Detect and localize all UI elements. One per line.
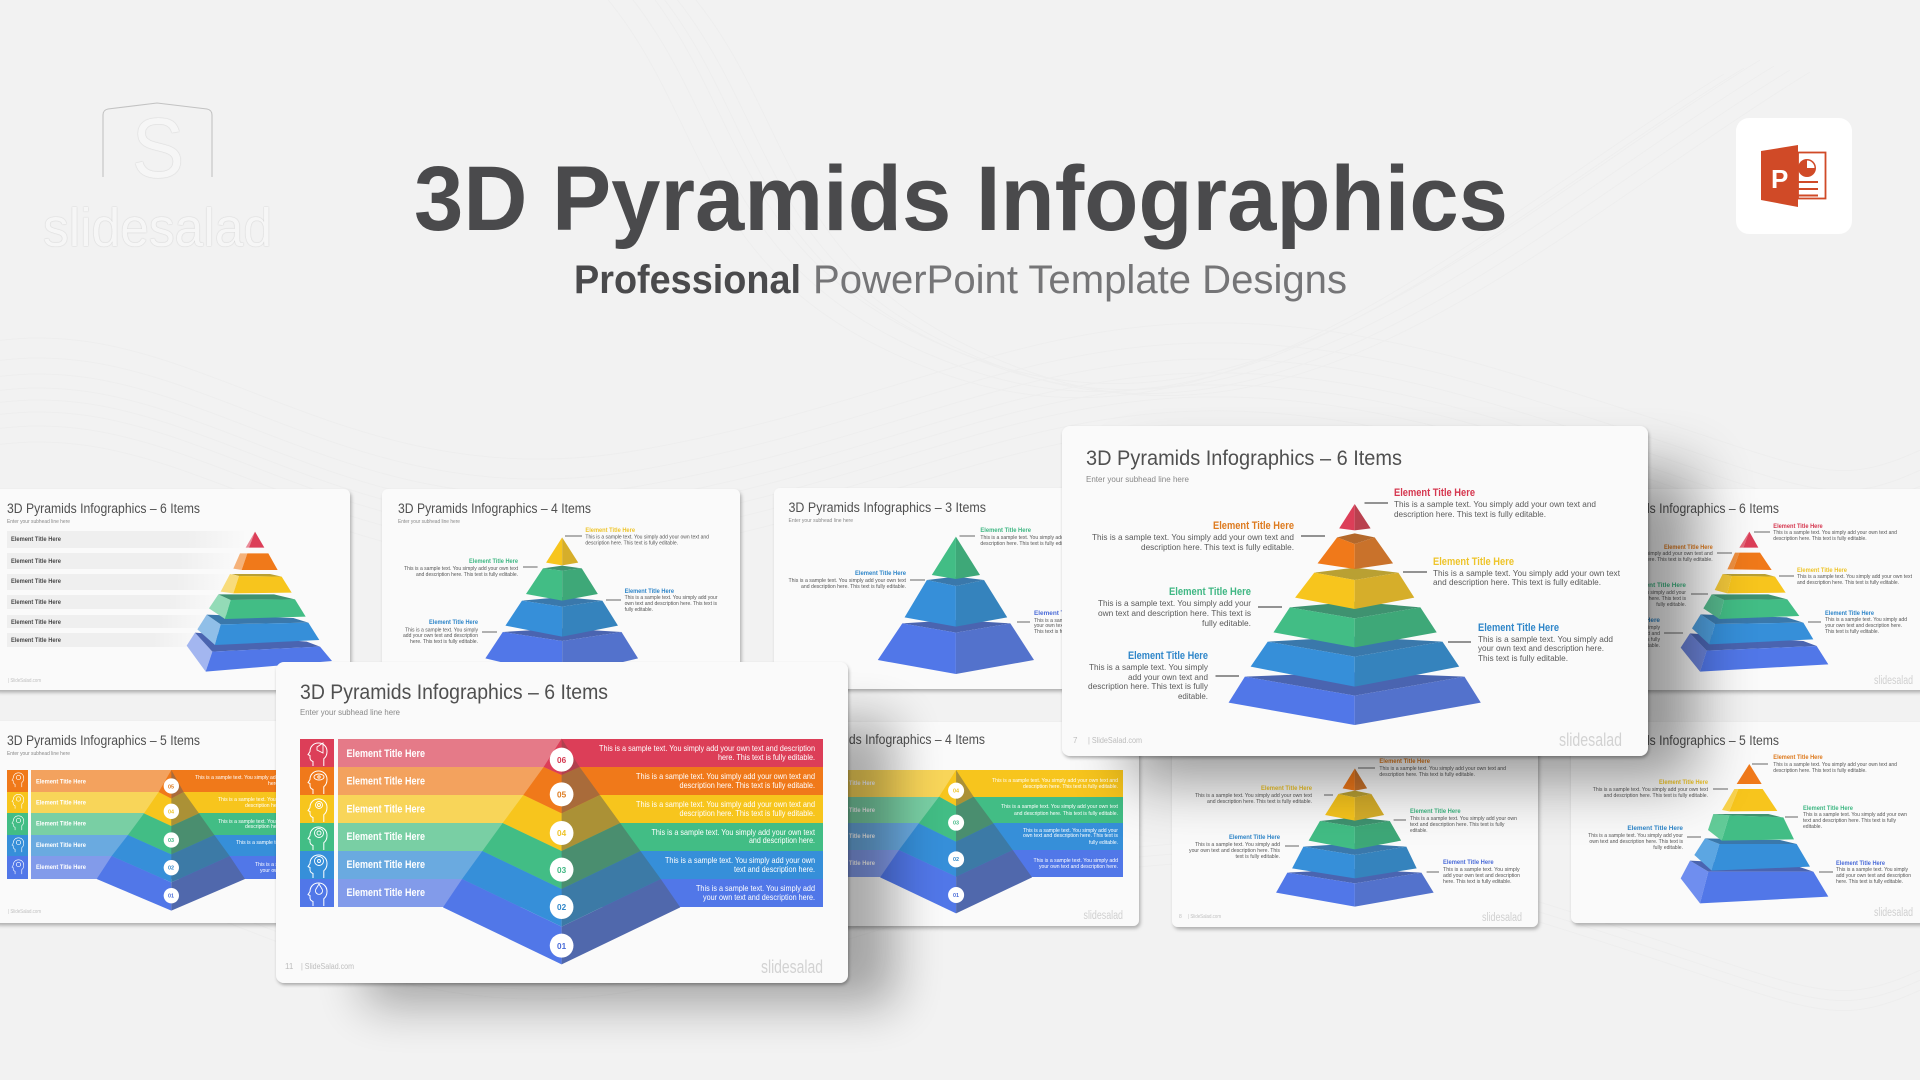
panel: slide 5 items perspective: fully editable. xyxy=(1653,845,1683,851)
callout: green: This is a sample text. You simply add your xyxy=(1098,598,1251,608)
panel: slide 5 items perspective xyxy=(1571,722,1920,923)
panel: slide list 6 items: Element Title Here xyxy=(11,599,61,606)
panel: slide 4 items: description here. This text is fully editable. xyxy=(585,541,678,547)
step numbers: 04 xyxy=(557,829,567,838)
step numbers: 01 xyxy=(557,942,567,951)
callout: orange: Element Title Here xyxy=(1213,520,1294,532)
panel: slide 5 items callouts: Element Title Here xyxy=(1229,834,1280,841)
panel: featured slide funnel 6 items xyxy=(276,662,848,983)
watermark: slidesalad xyxy=(1559,730,1622,750)
step numbers: 02 xyxy=(557,903,567,912)
panel: slide 4 items funnel: your own text and description here. xyxy=(1039,864,1118,870)
panel: slide list 6 items: 3D Pyramids Infographics – 6 Items xyxy=(7,501,200,516)
footer: | SlideSalad.com xyxy=(301,962,354,971)
panel: slide 5 items funnel: 3D Pyramids Infographics – 5 Items xyxy=(7,733,200,748)
subtitle: PowerPoint Template Designs xyxy=(813,258,1347,302)
panel: slide 4 items funnel: 3D Pyramids Infographics – 4 Items xyxy=(792,732,985,747)
row descriptions: text and description here. xyxy=(734,864,815,874)
row descriptions: description here. This text is fully editable. xyxy=(680,808,815,818)
panel: slide 4 items: here. This text is fully editable. xyxy=(410,639,478,645)
callout: orange: description here. This text is fully editable. xyxy=(1141,542,1294,552)
row titles: Element Title Here xyxy=(346,859,425,871)
panel: slide 3 items: Enter your subhead line here xyxy=(788,518,853,524)
panel: slide 5 items funnel xyxy=(0,721,350,923)
panel: slide 6 items perspective xyxy=(1568,489,1920,690)
panel: slide 5 items callouts: add your own text and description xyxy=(1443,873,1520,879)
row titles: Element Title Here xyxy=(346,831,425,843)
panel: slide 6 items perspective: description here. This text is fully editable. xyxy=(1618,557,1713,563)
callout: indigo xyxy=(1088,650,1239,701)
panel: slide 6 items perspective: 3D Pyramids Infographics – 6 Items xyxy=(1586,501,1779,516)
panel: slide 5 items perspective: Element Title Here xyxy=(1773,754,1823,761)
panel: slide 4 items funnel: and description here. This text is fully editable. xyxy=(1014,811,1118,817)
panel: slide 6 items perspective: Element Title Here xyxy=(1664,544,1713,551)
callout: blue xyxy=(1448,622,1613,663)
panel: featured slide pyramid 6 items xyxy=(1062,426,1648,756)
panel: slide 5 items perspective: Element Title Here xyxy=(1803,805,1853,812)
row descriptions: This is a sample text. You simply add xyxy=(696,883,815,893)
callout: blue: This text is fully editable. xyxy=(1478,653,1568,663)
panel: slide 4 items: This is a sample text. You simply add your xyxy=(625,595,718,601)
callout: indigo: This is a sample text. You simply xyxy=(1089,662,1209,672)
panel: slide 4 items: own text and description here. This text is xyxy=(625,601,717,607)
panel: slide 4 items funnel: slidesalad xyxy=(1084,910,1123,922)
panel: slide 5 items funnel: Element Title Here xyxy=(36,842,86,849)
panel: slide 4 items funnel: own text and description here. This text is xyxy=(1023,833,1118,839)
row titles: Element Title Here xyxy=(346,748,425,760)
panel: slide 5 items funnel: Element Title Here xyxy=(36,778,86,786)
row descriptions: This is a sample text. You simply add your own xyxy=(665,855,815,865)
logo wordmark: slidesalad xyxy=(43,198,272,258)
heading: 3D Pyramids Infographics – 6 Items xyxy=(1086,447,1402,470)
panel: slide list 6 items: Element Title Here xyxy=(11,619,61,626)
panel: slide 5 items callouts: text is fully editable. xyxy=(1236,854,1280,860)
panel: slide 3 items: This is a sample text. You simply add your own text xyxy=(788,578,907,584)
panel: slide list 6 items xyxy=(0,489,350,690)
callout: orange: This is a sample text. You simply add your own text and xyxy=(1092,532,1294,542)
chart: 3D pyramid xyxy=(1229,504,1481,725)
callout: green xyxy=(1098,586,1282,628)
row titles: Element Title Here xyxy=(346,804,425,816)
panel: slide 3 items: This is a sample text. xyxy=(1034,618,1082,624)
row descriptions xyxy=(599,743,816,902)
icon: PowerPoint: P xyxy=(1771,164,1788,194)
panel: slide 6 items perspective: Element Title Here xyxy=(1825,610,1874,617)
panel: slide 3 items: This is a sample text. You simply add your own text and xyxy=(980,535,1106,541)
panel: slide 6 items perspective: Element Title Here xyxy=(1604,617,1660,624)
callout: yellow: This is a sample text. You simply add your own text xyxy=(1433,568,1621,578)
panel: slide 5 items perspective: 3D Pyramids Infographics – 5 Items xyxy=(1586,733,1779,748)
panel: slide 3 items: description here. This text is fully editable. xyxy=(980,541,1075,547)
panel: slide 6 items perspective: Element Title Here xyxy=(1630,582,1686,589)
watermark: slidesalad xyxy=(761,957,823,977)
panel: slide 5 items funnel: Enter your subhead line here xyxy=(7,751,70,757)
callout: red xyxy=(1364,487,1596,519)
heading: 3D Pyramids Infographics – 6 Items xyxy=(300,681,608,704)
panel: slide 5 items perspective: This is a sample text. You simply add your own text and xyxy=(1773,762,1897,768)
panel: slide 4 items funnel: description here. This text is fully editable. xyxy=(1023,784,1118,790)
row titles xyxy=(346,748,425,899)
panel: slide 5 items perspective: This is a sample text. You simply add your own xyxy=(1803,812,1907,818)
callout: yellow: Element Title Here xyxy=(1433,556,1514,568)
panel: slide 4 items: and description here. This text is fully editable. xyxy=(416,572,518,578)
panel: slide 6 items perspective: This is a sample text. You simply add your own text and xyxy=(1588,551,1713,557)
panel: slide 4 items funnel: This is a sample text. You simply add your own text xyxy=(1001,804,1119,810)
subtitle xyxy=(574,258,1347,302)
row descriptions: your own text and description here. xyxy=(703,892,815,902)
panel: slide 5 items callouts: Element Title Here xyxy=(1410,808,1461,815)
footer: 11 xyxy=(285,962,294,971)
row descriptions: and description here. xyxy=(749,835,815,845)
callout: orange xyxy=(1092,520,1325,552)
callout: blue: This is a sample text. You simply add xyxy=(1478,634,1613,644)
callout: green: fully editable. xyxy=(1202,618,1251,628)
row titles: Element Title Here xyxy=(346,887,425,899)
row descriptions: description here. This text is fully editable. xyxy=(680,780,815,790)
panel: slide 4 items funnel: 04 xyxy=(953,788,959,794)
panel: slide 4 items funnel: Element Title Here xyxy=(825,860,875,867)
panel: slide 6 items perspective: This is a sample text. You simply add xyxy=(1825,617,1907,623)
logo: slidesalad xyxy=(43,101,272,258)
panel: slide 4 items xyxy=(382,489,740,690)
panel: slide 4 items: fully editable. xyxy=(625,607,653,613)
panel: slide 5 items callouts: This is a sample text. You simply add your own text xyxy=(1195,793,1313,799)
colour bars xyxy=(338,739,823,907)
row descriptions: This is a sample text. You simply add your own text and xyxy=(636,799,815,809)
step numbers: 05 xyxy=(557,790,567,800)
panel: slide 5 items perspective: Element Title Here xyxy=(1627,825,1683,832)
panel: slide 4 items: Element Title Here xyxy=(585,527,635,534)
panel: slide 5 items perspective: This is a sample text. You simply xyxy=(1836,867,1908,873)
subhead: Enter your subhead line here xyxy=(1086,474,1189,484)
panel: slide 5 items funnel: This is a sample text. You simply add xyxy=(255,862,339,868)
panel: slide 4 items funnel: 02 xyxy=(953,857,959,863)
panel: slide 5 items callouts: 8 xyxy=(1179,914,1182,920)
panel: slide 4 items funnel: Element Title Here xyxy=(825,780,875,787)
panel: slide 5 items funnel: 01 xyxy=(168,894,174,900)
chart: inverted tip pyramid xyxy=(443,739,680,964)
panel: slide 5 items perspective: add your own text and description xyxy=(1836,873,1911,879)
panel: slide 5 items callouts: This is a sample text. You simply add xyxy=(1195,842,1280,848)
panel: slide 5 items perspective: text and description here. This text is fully xyxy=(1803,818,1896,824)
panel: slide 6 items perspective: fully editable. xyxy=(1656,602,1686,608)
footer: 7 xyxy=(1073,736,1078,745)
panel: slide 6 items perspective: and description here. This text is fully editable. xyxy=(1797,580,1899,586)
step numbers: 03 xyxy=(557,866,567,875)
logo letter: S xyxy=(132,101,184,195)
panel: slide 4 items: 3D Pyramids Infographics – 4 Items xyxy=(398,501,591,516)
panel: slide 5 items perspective: editable. xyxy=(1803,824,1822,830)
panel: slide 4 items funnel: 01 xyxy=(953,893,959,899)
panel: slide list 6 items: | SlideSalad.com xyxy=(8,678,41,684)
panel: slide 5 items funnel: description here. This text is fully editable. xyxy=(245,824,339,830)
callout: yellow: and description here. This text is fully editable. xyxy=(1433,577,1601,587)
row descriptions: here. This text is fully editable. xyxy=(718,752,815,762)
panel: slide 5 items callouts: Element Title Here xyxy=(1261,785,1312,792)
panel: slide 5 items funnel: | SlideSalad.com xyxy=(8,909,41,915)
panel: slide 3 items: This text is fully xyxy=(1034,629,1069,635)
panel: slide 5 items perspective: Element Title Here xyxy=(1836,860,1885,867)
panel: slide 4 items: Enter your subhead line here xyxy=(398,519,460,525)
panel: slide 4 items funnel: 03 xyxy=(953,820,959,826)
panel: slide 6 items perspective: your own text and description here. xyxy=(1825,623,1902,629)
panel: slide 5 items funnel: Element Title Here xyxy=(36,820,86,828)
panel: slide 4 items funnel xyxy=(781,722,1139,926)
panel: slide 5 items funnel: 05 xyxy=(168,784,174,790)
panel: slide 5 items callouts: Element Title Here xyxy=(1443,859,1494,866)
panel: slide 6 items perspective: Element Title Here xyxy=(1773,523,1823,530)
panel: slide 5 items callouts: Element Title Here xyxy=(1379,758,1430,765)
callout: indigo: editable. xyxy=(1178,691,1208,701)
panel: slide 3 items: Element Title Here xyxy=(980,527,1031,534)
panel: slide 5 items callouts: here. This text is fully editable. xyxy=(1443,879,1512,885)
callout: blue: your own text and description here. xyxy=(1478,643,1604,653)
panel: slide 5 items funnel: description here. This text is fully editable. xyxy=(245,803,339,809)
panel: slide 5 items callouts: editable. xyxy=(1410,828,1428,834)
panel: slide 4 items: This is a sample text. You simply add your own text xyxy=(404,566,519,572)
panel: slide 4 items: This is a sample text. You simply add your own text and xyxy=(585,535,709,541)
step numbers: 06 xyxy=(557,756,567,765)
panel: slide 3 items: Element Title Here xyxy=(1034,610,1090,617)
title: 3D Pyramids Infographics xyxy=(414,148,1508,250)
panel: slide 6 items perspective: description here. This text is fully xyxy=(1586,637,1660,643)
panel: slide 3 items: your own text and xyxy=(1034,623,1074,629)
panel: slide 5 items perspective: own text and description here. This text is xyxy=(1589,839,1683,845)
subtitle: Professional xyxy=(574,258,801,302)
panel: slide 6 items perspective: own text and description here. This text is xyxy=(1592,596,1686,602)
panel: slide 6 items perspective: add your own text and xyxy=(1610,631,1660,637)
panel: slide 5 items callouts: slidesalad xyxy=(1482,912,1522,924)
icon column xyxy=(300,739,334,907)
panel: slide 5 items funnel: Element Title Here xyxy=(36,800,86,806)
icon: PowerPoint xyxy=(1736,118,1852,234)
panel: slide 5 items callouts: This is a sample text. You simply add your own xyxy=(1410,816,1517,822)
panel: slide 5 items funnel: your own text and description here. xyxy=(260,868,339,874)
panel: slide 6 items perspective: Element Title Here xyxy=(1797,567,1847,574)
row titles: Element Title Here xyxy=(346,776,425,788)
panel: slide 5 items perspective: here. This text is fully editable. xyxy=(1836,879,1903,885)
callout: yellow xyxy=(1403,556,1621,587)
panel: slide list 6 items: Element Title Here xyxy=(11,536,61,543)
subhead: Enter your subhead line here xyxy=(300,707,400,717)
panel: slide 4 items funnel: fully editable. xyxy=(1089,840,1118,846)
panel: slide 4 items: This is a sample text. You simply xyxy=(405,627,478,633)
callout: red: This is a sample text. You simply add your own text and xyxy=(1394,499,1596,509)
callout: indigo: description here. This text is fully xyxy=(1088,681,1209,691)
panel: slide list 6 items: Enter your subhead line here xyxy=(7,519,70,525)
panel: slide 5 items funnel: This is a sample text. You simply add your own text and xyxy=(218,797,343,803)
callout: green: own text and description here. This text is xyxy=(1098,608,1251,618)
panel: slide 4 items funnel: This is a sample text. You simply add your xyxy=(1023,828,1118,834)
row descriptions: This is a sample text. You simply add your own text xyxy=(652,827,816,837)
panel: slide 5 items callouts: description here. This text is fully editable. xyxy=(1379,772,1475,778)
panel: slide 5 items funnel: 04 xyxy=(168,810,174,816)
panel: slide 4 items funnel: Element Title Here xyxy=(825,807,875,814)
panel: slide 3 items xyxy=(774,488,1132,689)
panel: slide 5 items funnel: 02 xyxy=(168,866,174,872)
panel: slide 5 items callouts: | SlideSalad.com xyxy=(1188,914,1221,920)
panel: slide 6 items perspective: This is a sample text. You simply add your xyxy=(1591,590,1686,596)
panel: slide 4 items funnel: Element Title Here xyxy=(825,833,875,840)
callout: green: Element Title Here xyxy=(1169,586,1251,598)
panel: slide 6 items perspective: This is a sample text. You simply xyxy=(1586,625,1660,631)
panel: slide 4 items: Element Title Here xyxy=(429,619,478,626)
panel: slide list 6 items: Element Title Here xyxy=(11,578,61,585)
panel: slide 5 items funnel: Element Title Here xyxy=(36,864,86,871)
panel: slide 6 items perspective: This text is fully editable. xyxy=(1825,629,1879,635)
panel: slide 6 items perspective: description here. This text is fully editable. xyxy=(1773,536,1867,542)
panel: slide 5 items callouts: This is a sample text. You simply xyxy=(1443,867,1520,873)
callout: indigo: Element Title Here xyxy=(1128,650,1208,662)
panel: slide 4 items funnel: This is a sample text. You simply add xyxy=(1034,858,1118,864)
panel: slide 5 items funnel: This is a sample text. You simply add your own text and xyxy=(195,775,320,781)
row descriptions: This is a sample text. You simply add your own text and xyxy=(636,771,815,781)
panel: slide 5 items callouts: and description here. This text is fully editable. xyxy=(1207,799,1312,805)
panel: slide 5 items perspective: This is a sample text. You simply add your own text xyxy=(1593,787,1709,793)
panel: slide 3 items: 3D Pyramids Infographics – 3 Items xyxy=(788,500,986,515)
logo badge xyxy=(103,103,212,177)
panel: slide 3 items: Element Title Here xyxy=(855,570,906,577)
panel: slide 4 items: Element Title Here xyxy=(469,558,518,565)
callout: blue: Element Title Here xyxy=(1478,622,1559,634)
panel: slide 5 items funnel: here. This text is fully editable. xyxy=(268,781,336,787)
panel: slide 5 items perspective: This is a sample text. You simply add your xyxy=(1588,833,1683,839)
panel: slide 5 items perspective: and description here. This text is fully editable. xyxy=(1604,793,1708,799)
panel: slide 5 items perspective: Element Title Here xyxy=(1659,779,1708,786)
panel: slide list 6 items: Element Title Here xyxy=(11,558,61,565)
callout: red: Element Title Here xyxy=(1394,487,1475,499)
panel: slide 5 items callouts xyxy=(1172,721,1538,927)
panel: slide 5 items perspective: description here. This text is fully editable. xyxy=(1773,768,1867,774)
panel: slide 6 items perspective: editable. xyxy=(1641,643,1660,649)
panel: slide 3 items: and description here. This text is fully editable. xyxy=(801,584,906,590)
panel: slide 5 items funnel: 03 xyxy=(168,838,174,844)
shadow under featured slides xyxy=(365,470,1695,1005)
panel: slide 5 items callouts: This is a sample text. You simply add your own text and xyxy=(1379,766,1506,772)
row descriptions: This is a sample text. You simply add your own text and description xyxy=(599,743,815,753)
panel: slide 5 items funnel: This is a sample text. You simply add your own text and xyxy=(218,819,343,825)
panel: slide 4 items: Element Title Here xyxy=(625,588,674,595)
callout: red: description here. This text is fully editable. xyxy=(1394,509,1546,519)
panel: slide 5 items funnel: This is a sample text. You simply add your own xyxy=(236,840,342,846)
panel: slide list 6 items: Element Title Here xyxy=(11,637,61,644)
panel: slide 4 items: add your own text and description xyxy=(403,633,478,639)
panel: slide 5 items callouts: your own text and description here. This xyxy=(1189,848,1280,854)
footer: | SlideSalad.com xyxy=(1088,736,1142,745)
panel: slide 5 items callouts: text and description here. This text is fully xyxy=(1410,822,1505,828)
panel: slide 6 items perspective: This is a sample text. You simply add your own text and xyxy=(1773,530,1897,536)
step numbers xyxy=(557,756,567,951)
callout: indigo: add your own text and xyxy=(1128,672,1208,682)
panel: slide 6 items perspective: This is a sample text. You simply add your own text xyxy=(1797,574,1913,580)
panel: slide 4 items funnel: This is a sample text. You simply add your own text and xyxy=(992,778,1118,784)
